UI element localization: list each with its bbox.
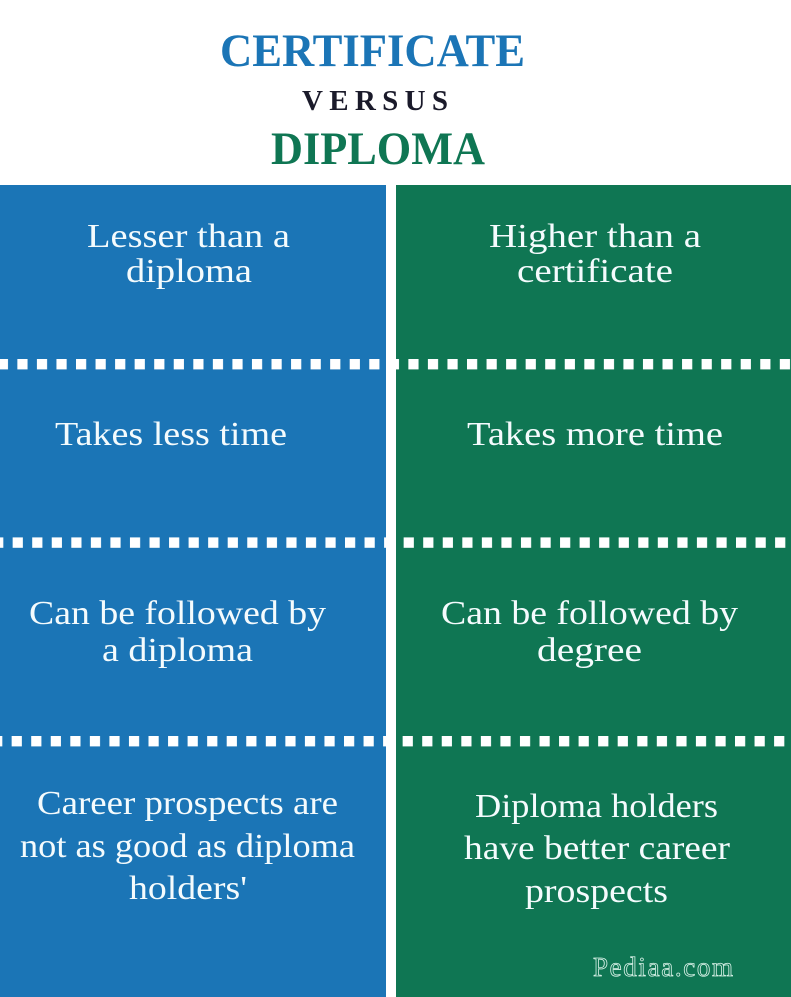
- diploma: career prospects: have better career: [464, 830, 731, 867]
- certificate: career prospects: holders': [129, 870, 247, 907]
- certificate: level: Lesser than a: [87, 218, 290, 255]
- certificate: next step: Can be followed by: [29, 595, 326, 632]
- diploma: next step: [441, 595, 738, 669]
- dotted divider: row 2: [0, 537, 791, 548]
- certificate: duration: Takes less time: [55, 416, 287, 453]
- certificate: career prospects: Career prospects are: [37, 785, 338, 822]
- diploma: level: [489, 218, 701, 290]
- certificate: level: diploma: [126, 253, 252, 290]
- panel: diploma column: [396, 185, 791, 997]
- diploma: career prospects: [464, 788, 731, 910]
- diploma: level: certificate: [517, 253, 673, 290]
- diploma: career prospects: prospects: [525, 873, 668, 910]
- watermark: Pediaa.com: Pediaa.com: [593, 952, 733, 982]
- certificate: career prospects: [20, 785, 355, 907]
- certificate: next step: [29, 595, 326, 669]
- dotted divider: row 1: [0, 359, 791, 369]
- title: diploma: DIPLOMA: [271, 123, 485, 175]
- diploma: next step: degree: [537, 632, 642, 669]
- certificate: career prospects: not as good as diploma: [20, 828, 355, 865]
- panel: certificate column: [0, 185, 386, 997]
- diploma: next step: Can be followed by: [441, 595, 738, 632]
- title: certificate: CERTIFICATE: [220, 25, 525, 77]
- diploma: level: Higher than a: [489, 218, 701, 255]
- diploma: duration: Takes more time: [467, 416, 723, 453]
- diploma: career prospects: Diploma holders: [475, 788, 718, 825]
- certificate: next step: a diploma: [102, 632, 253, 669]
- dotted divider: row 3: [0, 736, 791, 746]
- title: versus: VERSUS: [302, 85, 448, 117]
- certificate: level: [87, 218, 290, 290]
